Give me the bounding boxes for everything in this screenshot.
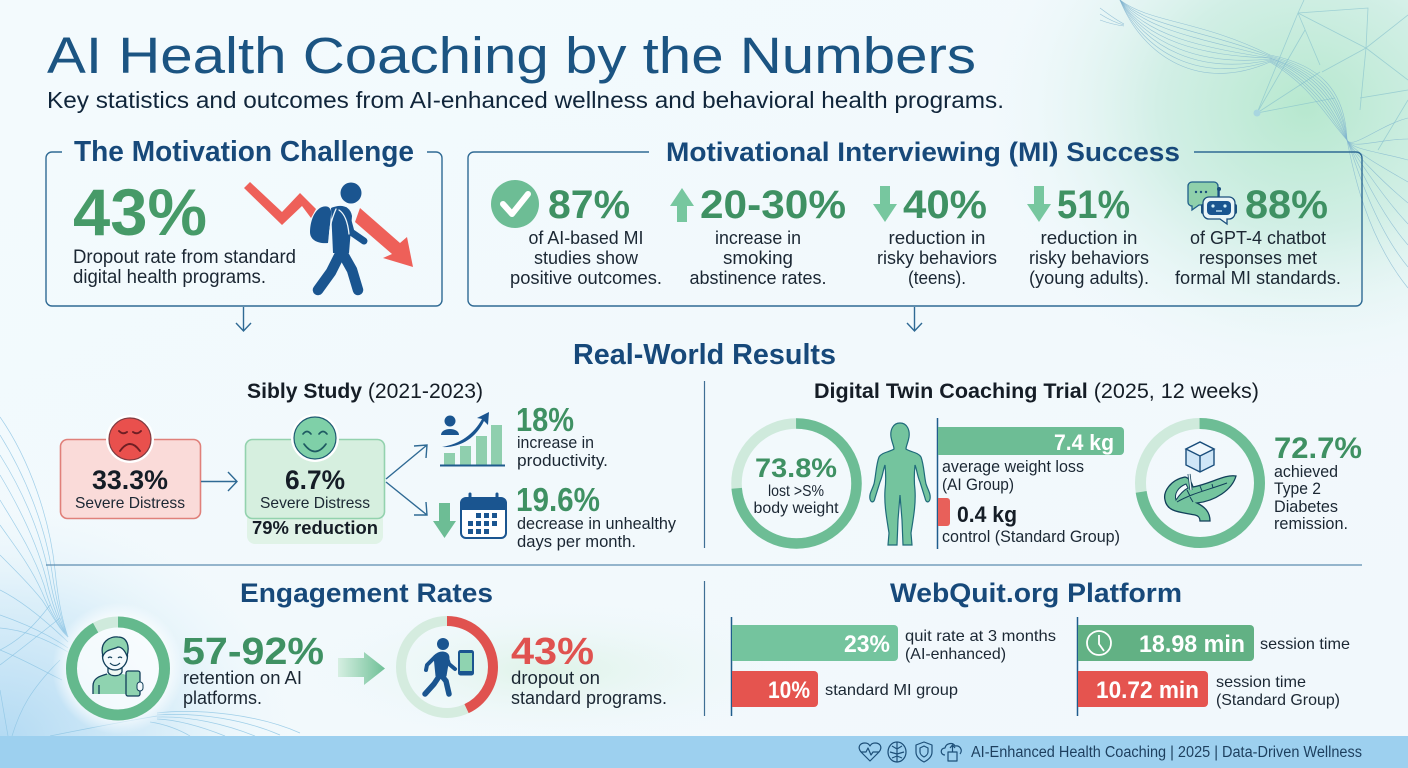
chart: session time bars: session time xyxy=(1216,674,1306,691)
stat: 51% young adults: risky behaviors xyxy=(1029,247,1149,268)
donut: dropout with walker and phone xyxy=(401,621,493,713)
engagement heading: Engagement Rates xyxy=(240,578,493,608)
chart: quit rate bars: (AI-enhanced) xyxy=(905,646,1006,663)
stat: 20-30% abstinence: abstinence rates. xyxy=(690,267,826,288)
donut: 73.8% lost weight: lost >S% xyxy=(768,483,824,500)
section: webquit.org platform xyxy=(732,578,1350,716)
stat: 40% teens: risky behaviors xyxy=(877,247,997,268)
stat: 43% dropout on standard xyxy=(511,631,667,708)
stat: 20-30% abstinence: increase in xyxy=(715,227,801,248)
stat: 18% productivity: productivity. xyxy=(517,451,608,470)
stat: 57-92% retention: 57-92% xyxy=(182,631,324,673)
stat: 72.7% remission: Diabetes xyxy=(1274,497,1338,516)
chart: weight loss bars: control (Standard Group) xyxy=(942,528,1120,546)
digital twin heading: Digital Twin Coaching Trial (2025, 12 weeks) xyxy=(814,380,1259,403)
stat: 18% productivity: 18% xyxy=(516,401,574,438)
stat: 43% dropout on standard: 43% xyxy=(511,631,594,673)
donut: 73.8% lost weight: body weight xyxy=(754,500,839,517)
chart: weight loss bars: average weight loss xyxy=(942,458,1084,476)
stat: 43% dropout on standard: standard programs. xyxy=(511,688,667,708)
stat: 20-30% abstinence xyxy=(670,183,846,288)
stat: 40% teens: (teens). xyxy=(908,267,966,288)
stat: 51% young adults: (young adults). xyxy=(1029,267,1149,288)
chart: weight loss bars: 7.4 kg xyxy=(1054,430,1114,455)
section: engagement rates xyxy=(52,578,667,734)
arrow: gradient right xyxy=(338,652,385,685)
stat: 51% young adults: reduction in xyxy=(1040,227,1138,248)
stat: 87% positive outcomes: 87% xyxy=(548,183,630,227)
card: after, severe distress: 79% reduction xyxy=(252,518,378,538)
panel: the motivation challenge xyxy=(46,136,442,306)
donut: 73.8% lost weight: 73.8% xyxy=(755,453,837,483)
donut: retention with person and phone xyxy=(52,602,184,734)
connector arrow: from challenge xyxy=(236,307,251,331)
icon: walking person with backpack xyxy=(310,182,364,290)
stat: 72.7% remission xyxy=(1274,432,1362,533)
chart: quit rate bars: 23% xyxy=(844,631,890,658)
stat: 40% teens: 40% xyxy=(903,183,987,227)
card: before, severe distress xyxy=(60,415,200,518)
footer bar xyxy=(0,736,1408,768)
stat: 51% young adults: 51% xyxy=(1057,183,1130,227)
card: after, severe distress: 6.7% xyxy=(285,465,345,495)
section: digital twin coaching trial xyxy=(736,380,1362,549)
stat: 57-92% retention xyxy=(182,631,324,708)
chart: weight loss bars xyxy=(938,418,1124,549)
card: after, severe distress xyxy=(246,414,384,544)
stat: 88% GPT-4: formal MI standards. xyxy=(1175,267,1341,288)
stat: 72.7% remission: Type 2 xyxy=(1274,479,1321,498)
chart: weight loss bars: 0.4 kg xyxy=(957,502,1017,527)
stat: 72.7% remission: achieved xyxy=(1274,462,1338,481)
stat: 19.6% unhealthy days: 19.6% xyxy=(516,481,600,518)
card: after, severe distress: Severe Distress xyxy=(260,495,370,512)
webquit heading: WebQuit.org Platform xyxy=(890,578,1182,608)
connector arrow: from MI success xyxy=(907,307,922,331)
stat: 87% positive outcomes xyxy=(491,180,662,288)
arrow: before to after xyxy=(201,472,237,491)
chart: quit rate bars: quit rate at 3 months xyxy=(905,628,1056,645)
sibly heading: Sibly Study (2021-2023) xyxy=(247,380,483,403)
section: sibly study xyxy=(60,380,676,551)
stat: 87% positive outcomes: positive outcomes. xyxy=(510,267,662,288)
branching arrows xyxy=(386,445,427,515)
card: before, severe distress: 33.3% xyxy=(92,465,168,495)
description line two: digital health programs. xyxy=(73,267,266,288)
footer text: AI-Enhanced Health Coaching | 2025 | Data-Driven Wellness xyxy=(971,744,1362,761)
chart: session time bars xyxy=(1078,617,1350,716)
stat: 57-92% retention: platforms. xyxy=(183,688,262,708)
icon: productivity chart xyxy=(440,412,505,466)
stat: 40% teens: reduction in xyxy=(888,227,986,248)
card: before, severe distress: Severe Distress xyxy=(75,495,185,512)
stat: 40% teens xyxy=(873,183,997,288)
subtitle: Key statistics and outcomes from AI-enhanced wellness and behavioral health programs. xyxy=(47,87,1004,113)
stat: 57-92% retention: retention on AI xyxy=(183,668,302,688)
donut: 73.8% lost weight xyxy=(736,424,856,544)
stat: 88% GPT-4 xyxy=(1175,182,1341,288)
stat: 72.7% remission: 72.7% xyxy=(1274,432,1362,465)
stat: 87% positive outcomes: of AI-based MI xyxy=(528,227,644,248)
footer icons: heart, brain, shield, cloud xyxy=(859,742,961,762)
chart: quit rate bars: 10% xyxy=(768,677,810,704)
title: AI Health Coaching by the Numbers xyxy=(47,27,976,84)
section heading: real-world results: Real-World Results xyxy=(573,339,836,371)
chart: weight loss bars: (AI Group) xyxy=(942,476,1014,494)
stat: 18% productivity xyxy=(516,401,608,470)
chart: session time bars: 10.72 min xyxy=(1096,677,1199,704)
chart: session time bars: (Standard Group) xyxy=(1216,692,1340,709)
stat: 87% positive outcomes: studies show xyxy=(534,247,639,268)
chart: quit rate bars xyxy=(732,617,1056,716)
stat: 51% young adults xyxy=(1027,183,1149,288)
stat: 19.6% unhealthy days: decrease in unhealthy xyxy=(517,514,676,533)
stat: 88% GPT-4: responses met xyxy=(1199,247,1317,268)
stat: 19.6% unhealthy days xyxy=(516,481,676,551)
chart: session time bars: session time xyxy=(1260,636,1350,653)
icon: human body xyxy=(870,423,930,545)
panel heading: the motivation challenge: The Motivation Challenge xyxy=(74,136,414,168)
chart: session time bars: 18.98 min xyxy=(1139,631,1245,658)
stat: 19.6% unhealthy days: days per month. xyxy=(517,532,636,551)
stat: 72.7% remission: remission. xyxy=(1274,514,1348,533)
panel heading: MI success: Motivational Interviewing (MI) Success xyxy=(666,137,1180,167)
icon: calendar xyxy=(461,494,506,538)
icon: down arrow xyxy=(433,503,456,538)
panel: motivational interviewing success xyxy=(468,137,1362,306)
chart: quit rate bars: standard MI group xyxy=(825,682,958,699)
description: dropout rate: Dropout rate from standard xyxy=(73,247,296,268)
stat: 88% GPT-4: of GPT-4 chatbot xyxy=(1190,227,1326,248)
stat: 20-30% abstinence: smoking xyxy=(723,247,793,268)
stat: 18% productivity: increase in xyxy=(517,433,594,452)
icon: declining red arrow xyxy=(244,182,413,267)
stat: 88% GPT-4: 88% xyxy=(1245,183,1328,227)
donut: 72.7% remission with pancreas xyxy=(1140,424,1260,542)
stat: 43% dropout on standard: dropout on xyxy=(511,668,600,688)
icon: clock xyxy=(1087,631,1111,655)
stat: 20-30% abstinence: 20-30% xyxy=(700,183,846,227)
stat: 43% dropout: 43% xyxy=(73,175,207,249)
